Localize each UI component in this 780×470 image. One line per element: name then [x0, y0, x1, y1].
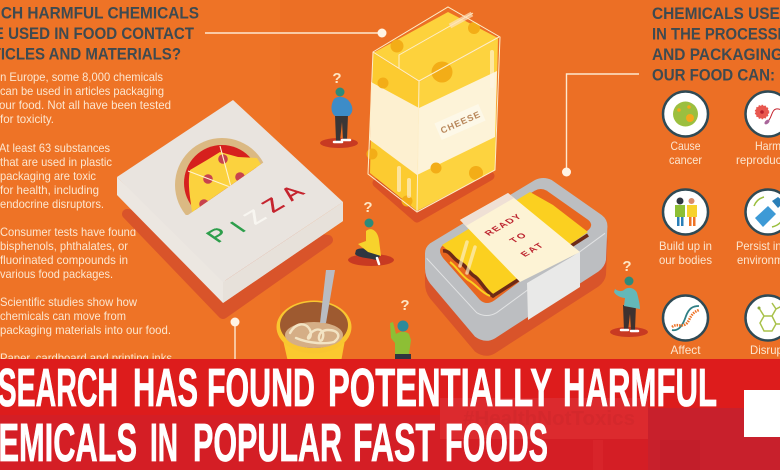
icon: cause cancer [663, 92, 708, 136]
pizza label: Z [238, 206, 272, 228]
text block: 63 substances: packaging are toxic [0, 169, 96, 183]
ready to eat label [482, 212, 546, 258]
person: blue top: ? [332, 70, 342, 87]
icon: persist in the environment [746, 190, 780, 234]
text block: consumer tests [0, 225, 136, 281]
pizza [175, 138, 264, 215]
shadow [377, 176, 490, 218]
text block: 63 substances: At least 63 substances [0, 141, 110, 155]
text block: 8,000 chemicals: In Europe, some 8,000 chemicals [0, 70, 163, 84]
noodle cup [276, 270, 352, 362]
icon: harm reproduction [746, 92, 780, 136]
person: yellow top, seated: ? [363, 199, 373, 216]
label: cause cancer: cancer [669, 153, 702, 167]
noodles [290, 324, 338, 343]
cheese carton [366, 7, 500, 218]
ready to eat label: TO [507, 231, 529, 245]
faded hashtag box: #HealthNotToxics [463, 408, 635, 430]
label: build up in our bodies: Build up in [659, 239, 712, 253]
heading: which harmful chemicals [0, 4, 199, 64]
text block: consumer tests: bisphenols, phthalates, or [0, 239, 128, 253]
label: cause cancer: Cause [670, 139, 701, 153]
text block: consumer tests: various food packages. [0, 267, 113, 281]
box sides [117, 177, 343, 303]
faded footer marks [593, 440, 700, 470]
lasagna [442, 192, 588, 297]
panel: harmful chemicals in food contact materials [0, 4, 199, 365]
tray shapes [425, 178, 607, 356]
label: cause cancer [669, 139, 702, 167]
text block: scientific studies: chemicals can move from [0, 309, 126, 323]
spoon [320, 270, 335, 323]
rim edge [427, 233, 605, 315]
text block: 8,000 chemicals: can be used in articles packaging [0, 84, 164, 98]
person: blue top [320, 70, 358, 148]
left face [370, 53, 419, 211]
heading: chemicals used [652, 4, 780, 84]
ready to eat label: READY [482, 212, 524, 237]
wrap band [460, 193, 580, 320]
pizza label: A [274, 181, 310, 204]
icon: build up in our bodies [663, 190, 708, 234]
text block: 8,000 chemicals: our food. Not all have been tested [0, 98, 171, 112]
ready to eat label: EAT [518, 242, 546, 258]
label: harm reproduction [736, 139, 780, 167]
carton outline and fold [368, 7, 500, 212]
cup rim [276, 300, 352, 354]
label: build up in our bodies [659, 239, 712, 267]
cheese label [434, 104, 486, 140]
text block: consumer tests: Consumer tests have found [0, 225, 136, 239]
connector: left heading to cheese box [205, 28, 386, 38]
connector: noodle cup [230, 318, 240, 360]
text block: scientific studies: packaging materials into our food. [0, 323, 171, 337]
cup body [283, 340, 345, 362]
headline line 1 [0, 358, 717, 418]
text block: 63 substances [0, 141, 112, 211]
faded hashtag box [440, 398, 648, 439]
icon: affect DNA [663, 296, 708, 340]
pizza label: Z [256, 194, 290, 216]
label: affect: Affect [670, 343, 701, 357]
connector: right heading to ready meal [562, 74, 639, 176]
headline line 1: HAS [133, 358, 198, 418]
right face [417, 38, 498, 211]
text block: 8,000 chemicals: for toxicity. [0, 112, 54, 126]
text block: 63 substances: for health, including [0, 183, 99, 197]
text block: 63 substances: that are used in plastic [0, 155, 112, 169]
cream band [370, 82, 419, 175]
banner background [0, 359, 780, 470]
pizza label: P [200, 224, 235, 246]
top face [373, 12, 498, 82]
person: teal top [610, 258, 648, 337]
text block: scientific studies [0, 295, 171, 337]
cheese label: CHEESE [439, 109, 481, 136]
text block: paper and inks: Paper, cardboard and printing inks [0, 351, 172, 365]
headline line 2 [0, 413, 548, 470]
person: green top [390, 297, 411, 360]
text block: consumer tests: fluorinated compounds in [0, 253, 128, 267]
pizza label: I [224, 218, 251, 236]
pizza label [200, 181, 310, 246]
headline banner [0, 358, 780, 470]
shadow [127, 214, 328, 314]
broth [285, 322, 343, 348]
text block: 63 substances: endocrine disruptors. [0, 197, 104, 211]
tray body [425, 178, 607, 341]
label: build up in our bodies: our bodies [659, 253, 712, 267]
headline line 1: FOUND [207, 358, 315, 418]
tray well [440, 189, 591, 303]
label: persist in the environment [736, 239, 780, 267]
ready meal tray [425, 178, 607, 356]
shadow [425, 193, 607, 356]
person: teal top: ? [622, 258, 632, 275]
person: green top: ? [400, 297, 410, 314]
pizza box [117, 100, 343, 314]
box lid [117, 100, 343, 282]
icon: disrupt hormones [746, 296, 780, 340]
white rectangle [744, 390, 780, 437]
cheese holes [366, 22, 483, 206]
person: yellow top, seated [348, 199, 394, 266]
panel: what the chemicals can do [652, 4, 780, 357]
headline line 1: POTENTIALLY [328, 358, 552, 418]
text block: scientific studies: Scientific studies show how [0, 295, 137, 309]
text block: 8,000 chemicals [0, 70, 171, 126]
